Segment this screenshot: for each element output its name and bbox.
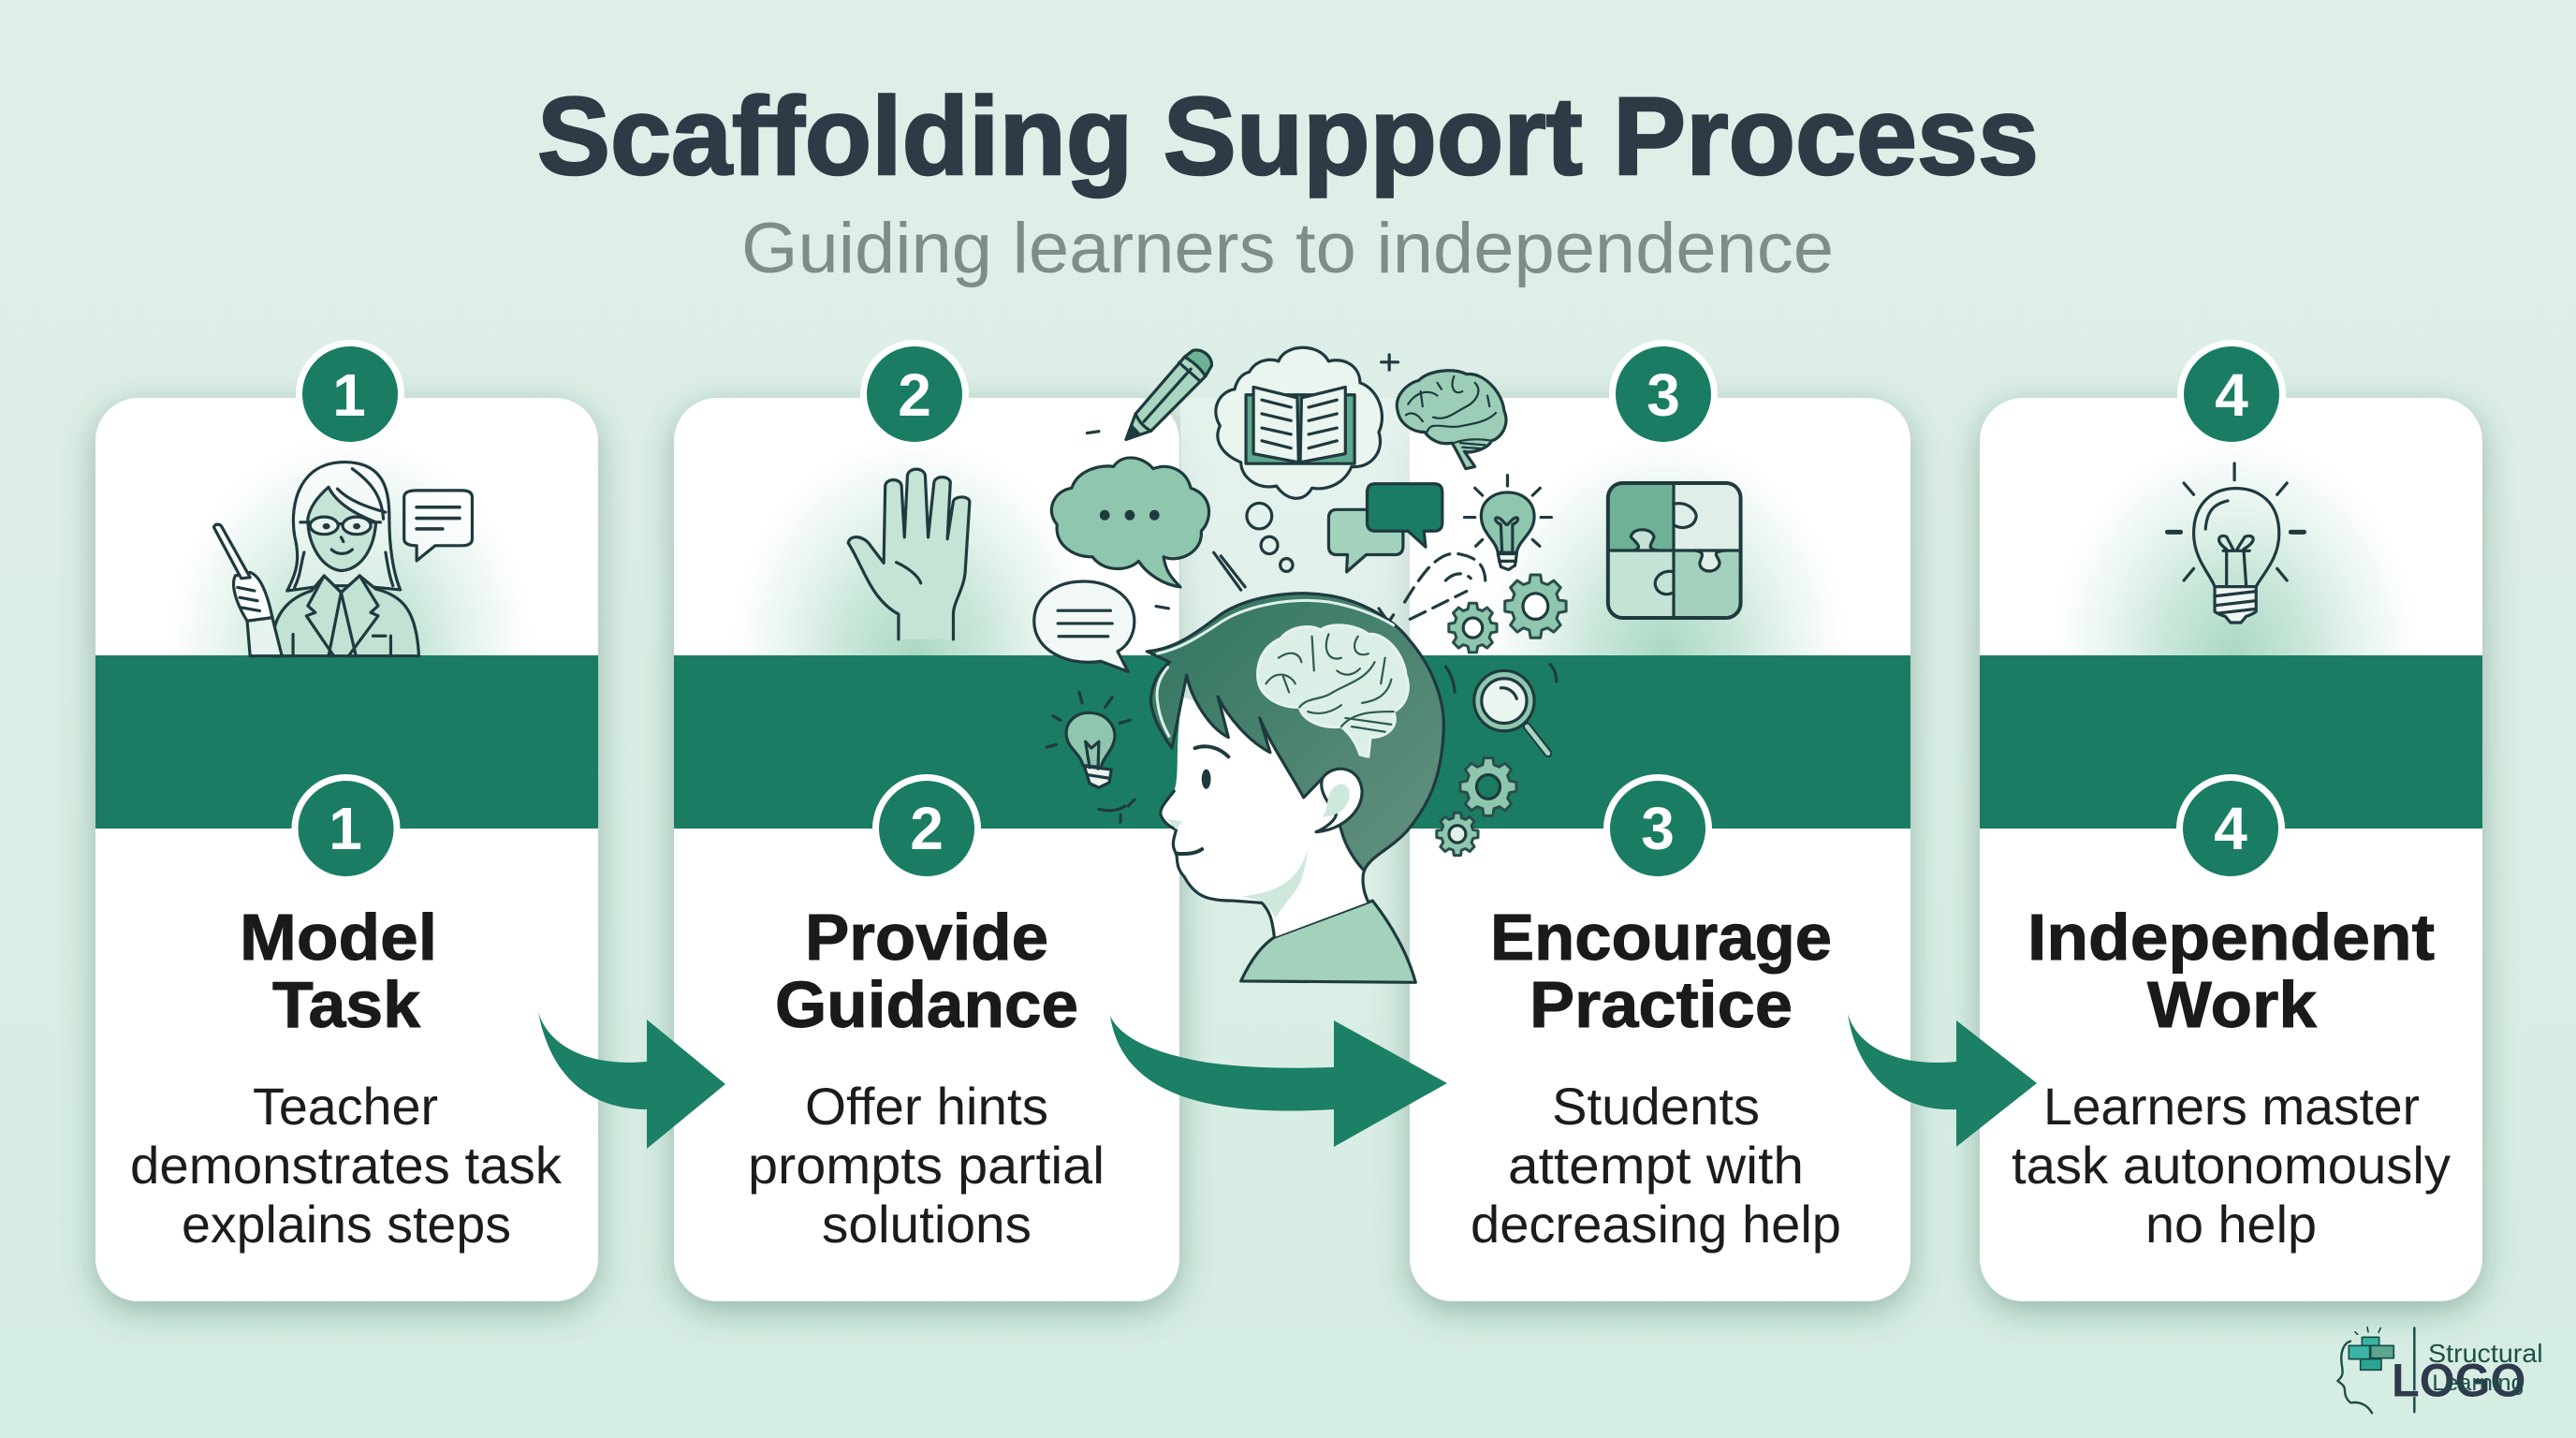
icon: light bulb [2168,463,2304,623]
brain inside head [1258,625,1408,756]
panel: step 1 model task [95,340,598,1301]
subtitle: Guiding learners to independence [741,209,1834,288]
description: independent work: no help [2145,1195,2317,1254]
heading: provide guidance [775,901,1078,1041]
heading: independent work [2027,901,2435,1041]
description: provide guidance [748,1077,1105,1254]
description: model task [130,1077,563,1254]
heading: provide guidance: Provide [805,901,1048,974]
icon glow 4 [2074,463,2396,655]
heading: encourage practice [1490,901,1832,1041]
logo wordmark: Structural: Structural [2428,1339,2543,1368]
top number badge 3 [1609,340,1718,448]
central illustration: child thinking [1034,347,1566,982]
dashed thought trail [1405,553,1486,619]
logo mark: head with blocks [2337,1328,2393,1413]
icon: text speech bubble [1034,581,1134,671]
gap highlight behind central illustration [1180,398,1410,791]
lower number badge 3 [1603,774,1712,883]
heading: encourage practice: Practice [1530,968,1793,1041]
logo placeholder: LOGO: LOGO [2392,1355,2525,1407]
boy's shirt [1241,901,1415,982]
icon glow 3 [1503,462,1825,655]
top number badge 1 [296,340,404,448]
description: independent work: Learners master [2043,1077,2420,1136]
heading: model task: Task [272,968,420,1041]
description: encourage practice: Students [1552,1077,1760,1136]
heading: provide guidance: Guidance [775,968,1078,1041]
logo wordmark: Learning: Learning [2432,1371,2525,1396]
icon glow 2 [754,462,1063,655]
icon: dots speech cloud [1051,458,1209,587]
description: independent work [2012,1077,2451,1254]
lower number badge 1 [292,774,401,883]
top number badge 4: 4 [2215,361,2248,429]
boy's face [1161,697,1368,937]
icon: pencil [1126,350,1211,439]
icon: raised hand [848,469,970,639]
description: provide guidance: solutions [822,1195,1032,1254]
icon: magnifying glass [1474,670,1548,754]
top number badge 2: 2 [898,361,931,429]
lower number badge 1: 1 [329,795,362,862]
heading: model task [240,901,437,1041]
top number badge 4 [2177,340,2286,448]
lower number badge 2 [872,774,981,883]
logo [2337,1328,2543,1413]
lower number badge 4 [2176,774,2285,883]
band 1 [95,655,598,829]
description: model task: demonstrates task [130,1136,563,1195]
icon: teacher with pointer and speech bubble [213,462,472,656]
band 4 [1980,655,2482,829]
heading: independent work: Independent [2027,901,2435,974]
lower number badge 3: 3 [1641,795,1675,862]
description: encourage practice: attempt with [1508,1136,1804,1195]
icon: puzzle [1608,483,1741,618]
heading: encourage practice: Encourage [1490,901,1832,974]
icon: brain upper right [1397,371,1506,469]
icon glow 1 [189,463,511,655]
description: model task: Teacher [253,1077,438,1136]
icon: light bulb upper right [1465,476,1551,570]
band 3 [1410,655,1910,829]
description: independent work: task autonomously [2012,1136,2451,1195]
boy's ear [1316,769,1362,832]
hair highlights [1157,600,1394,736]
icon: overlapping chat bubbles [1328,484,1442,572]
description: provide guidance: Offer hints [805,1077,1048,1136]
band 2 [674,655,1179,829]
arrow: step 1 to 2 [538,1012,725,1149]
panel: step 4 independent work [1980,340,2482,1301]
description: encourage practice [1471,1077,1841,1254]
heading: model task: Model [240,901,437,974]
top number badge 3: 3 [1647,361,1680,429]
accent strokes and motion lines [1087,355,1557,692]
description: provide guidance: prompts partial [748,1136,1105,1195]
panel: step 2 provide guidance [674,340,1179,1301]
boy's hair [1147,594,1443,871]
arrow: step 2 to 3 [1110,1016,1447,1147]
lower number badge 2: 2 [910,795,944,862]
title: Scaffolding Support Process [537,75,2039,198]
top number badge 1: 1 [332,361,366,429]
lower number badge 4: 4 [2214,795,2247,862]
icon: book thought cloud [1216,347,1382,571]
logo divider [2413,1328,2416,1412]
description: encourage practice: decreasing help [1471,1195,1841,1254]
top number badge 2 [860,340,969,448]
face outline and features [1161,746,1368,937]
arrow: step 3 to 4 [1848,1014,2037,1147]
description: model task: explains steps [182,1195,511,1254]
panel: step 3 encourage practice [1410,340,1910,1301]
icon: four gears [1437,575,1566,856]
heading: independent work: Work [2147,968,2317,1041]
icon: light bulb lower left [1046,692,1134,822]
